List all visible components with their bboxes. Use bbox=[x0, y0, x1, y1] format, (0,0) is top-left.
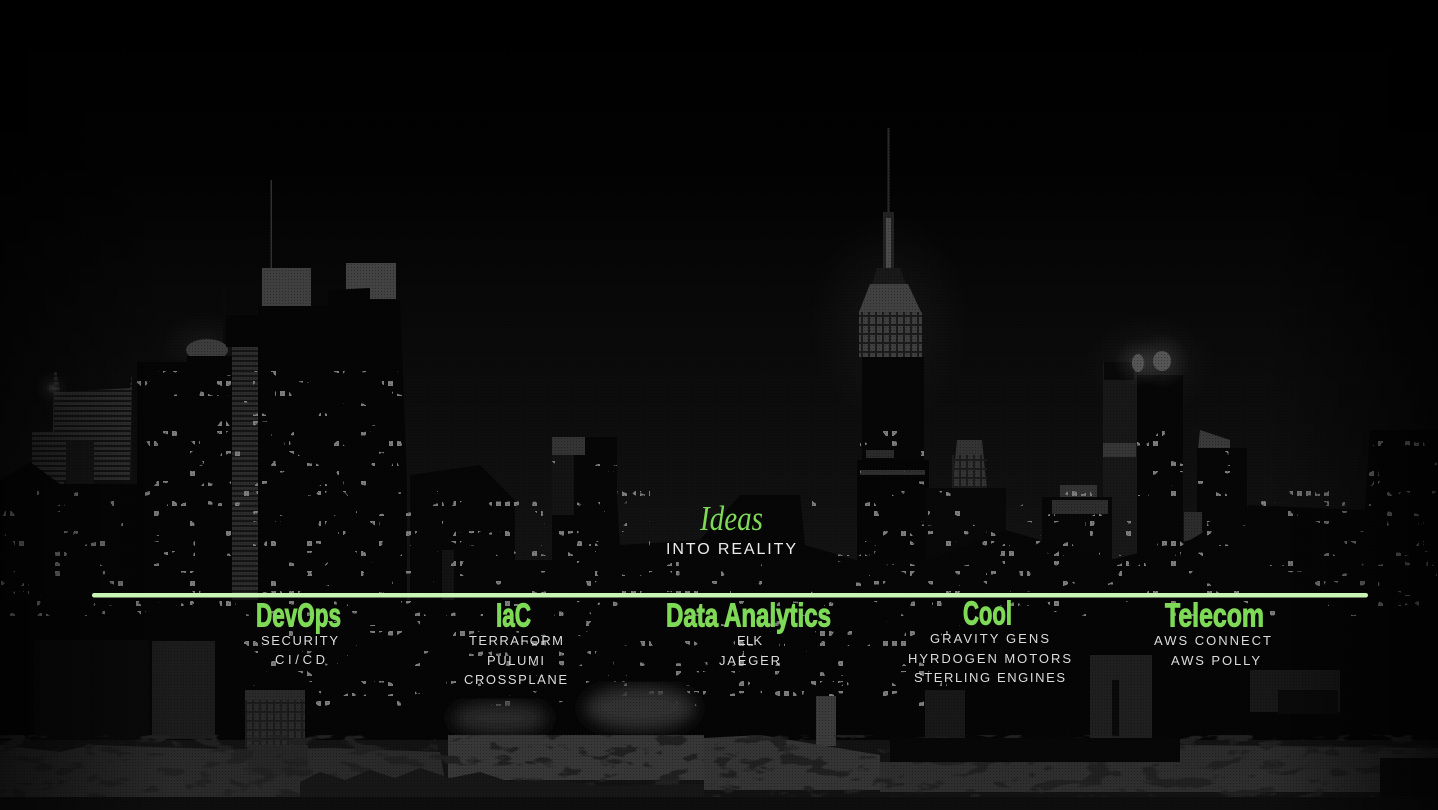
list: DevOps topics: CI/CD bbox=[275, 652, 325, 667]
left lit tower tops bbox=[32, 180, 396, 595]
list: Data Analytics topics: JAEGER bbox=[719, 653, 780, 668]
list: DevOps topics: SECURITY bbox=[261, 633, 338, 648]
list: Telecom topics: AWS CONNECT bbox=[1154, 633, 1271, 648]
list: Telecom topics bbox=[1154, 633, 1271, 668]
scattered window lights bbox=[1, 371, 1437, 706]
central and right buildings bbox=[552, 333, 1247, 602]
lower dark city band bbox=[0, 430, 1438, 740]
heading: Cool: Cool bbox=[963, 596, 1012, 632]
list: DevOps topics bbox=[261, 633, 338, 667]
column: Data Analytics bbox=[666, 598, 831, 668]
list: IaC topics: TERRAFORM bbox=[469, 633, 563, 648]
lower-right block faces bbox=[925, 655, 1340, 760]
left dark towers bbox=[137, 288, 407, 606]
list: Cool topics: GRAVITY GENS bbox=[930, 631, 1049, 646]
list: Cool topics: STERLING ENGINES bbox=[914, 670, 1065, 685]
list: IaC topics: PULUMI bbox=[487, 653, 544, 668]
heading: Data Analytics: Data Analytics bbox=[666, 598, 831, 634]
list: IaC topics: CROSSPLANE bbox=[464, 672, 567, 687]
column: Cool bbox=[908, 596, 1071, 685]
heading: IaC: IaC bbox=[496, 598, 531, 634]
Empire State Building bbox=[857, 128, 929, 600]
list: Cool topics bbox=[908, 631, 1071, 685]
column: DevOps bbox=[256, 598, 341, 667]
heading: Ideas into reality bbox=[666, 499, 796, 558]
list: Data Analytics topics: ELK bbox=[737, 633, 762, 648]
heading: Telecom: Telecom bbox=[1165, 598, 1264, 634]
timeline line bbox=[92, 593, 1368, 598]
column: IaC bbox=[464, 598, 567, 687]
script word: Ideas: Ideas bbox=[699, 499, 763, 538]
list: Data Analytics topics bbox=[719, 633, 780, 668]
waterfront ground bbox=[0, 686, 1438, 810]
subheading: into reality: INTO REALITY bbox=[666, 541, 796, 558]
lower-left block faces bbox=[34, 640, 305, 770]
heading: DevOps: DevOps bbox=[256, 598, 341, 634]
list: Cool topics: HYRDOGEN MOTORS bbox=[908, 651, 1071, 666]
column: Telecom bbox=[1154, 598, 1271, 668]
list: Telecom topics: AWS POLLY bbox=[1171, 653, 1260, 668]
list: IaC topics bbox=[464, 633, 567, 687]
